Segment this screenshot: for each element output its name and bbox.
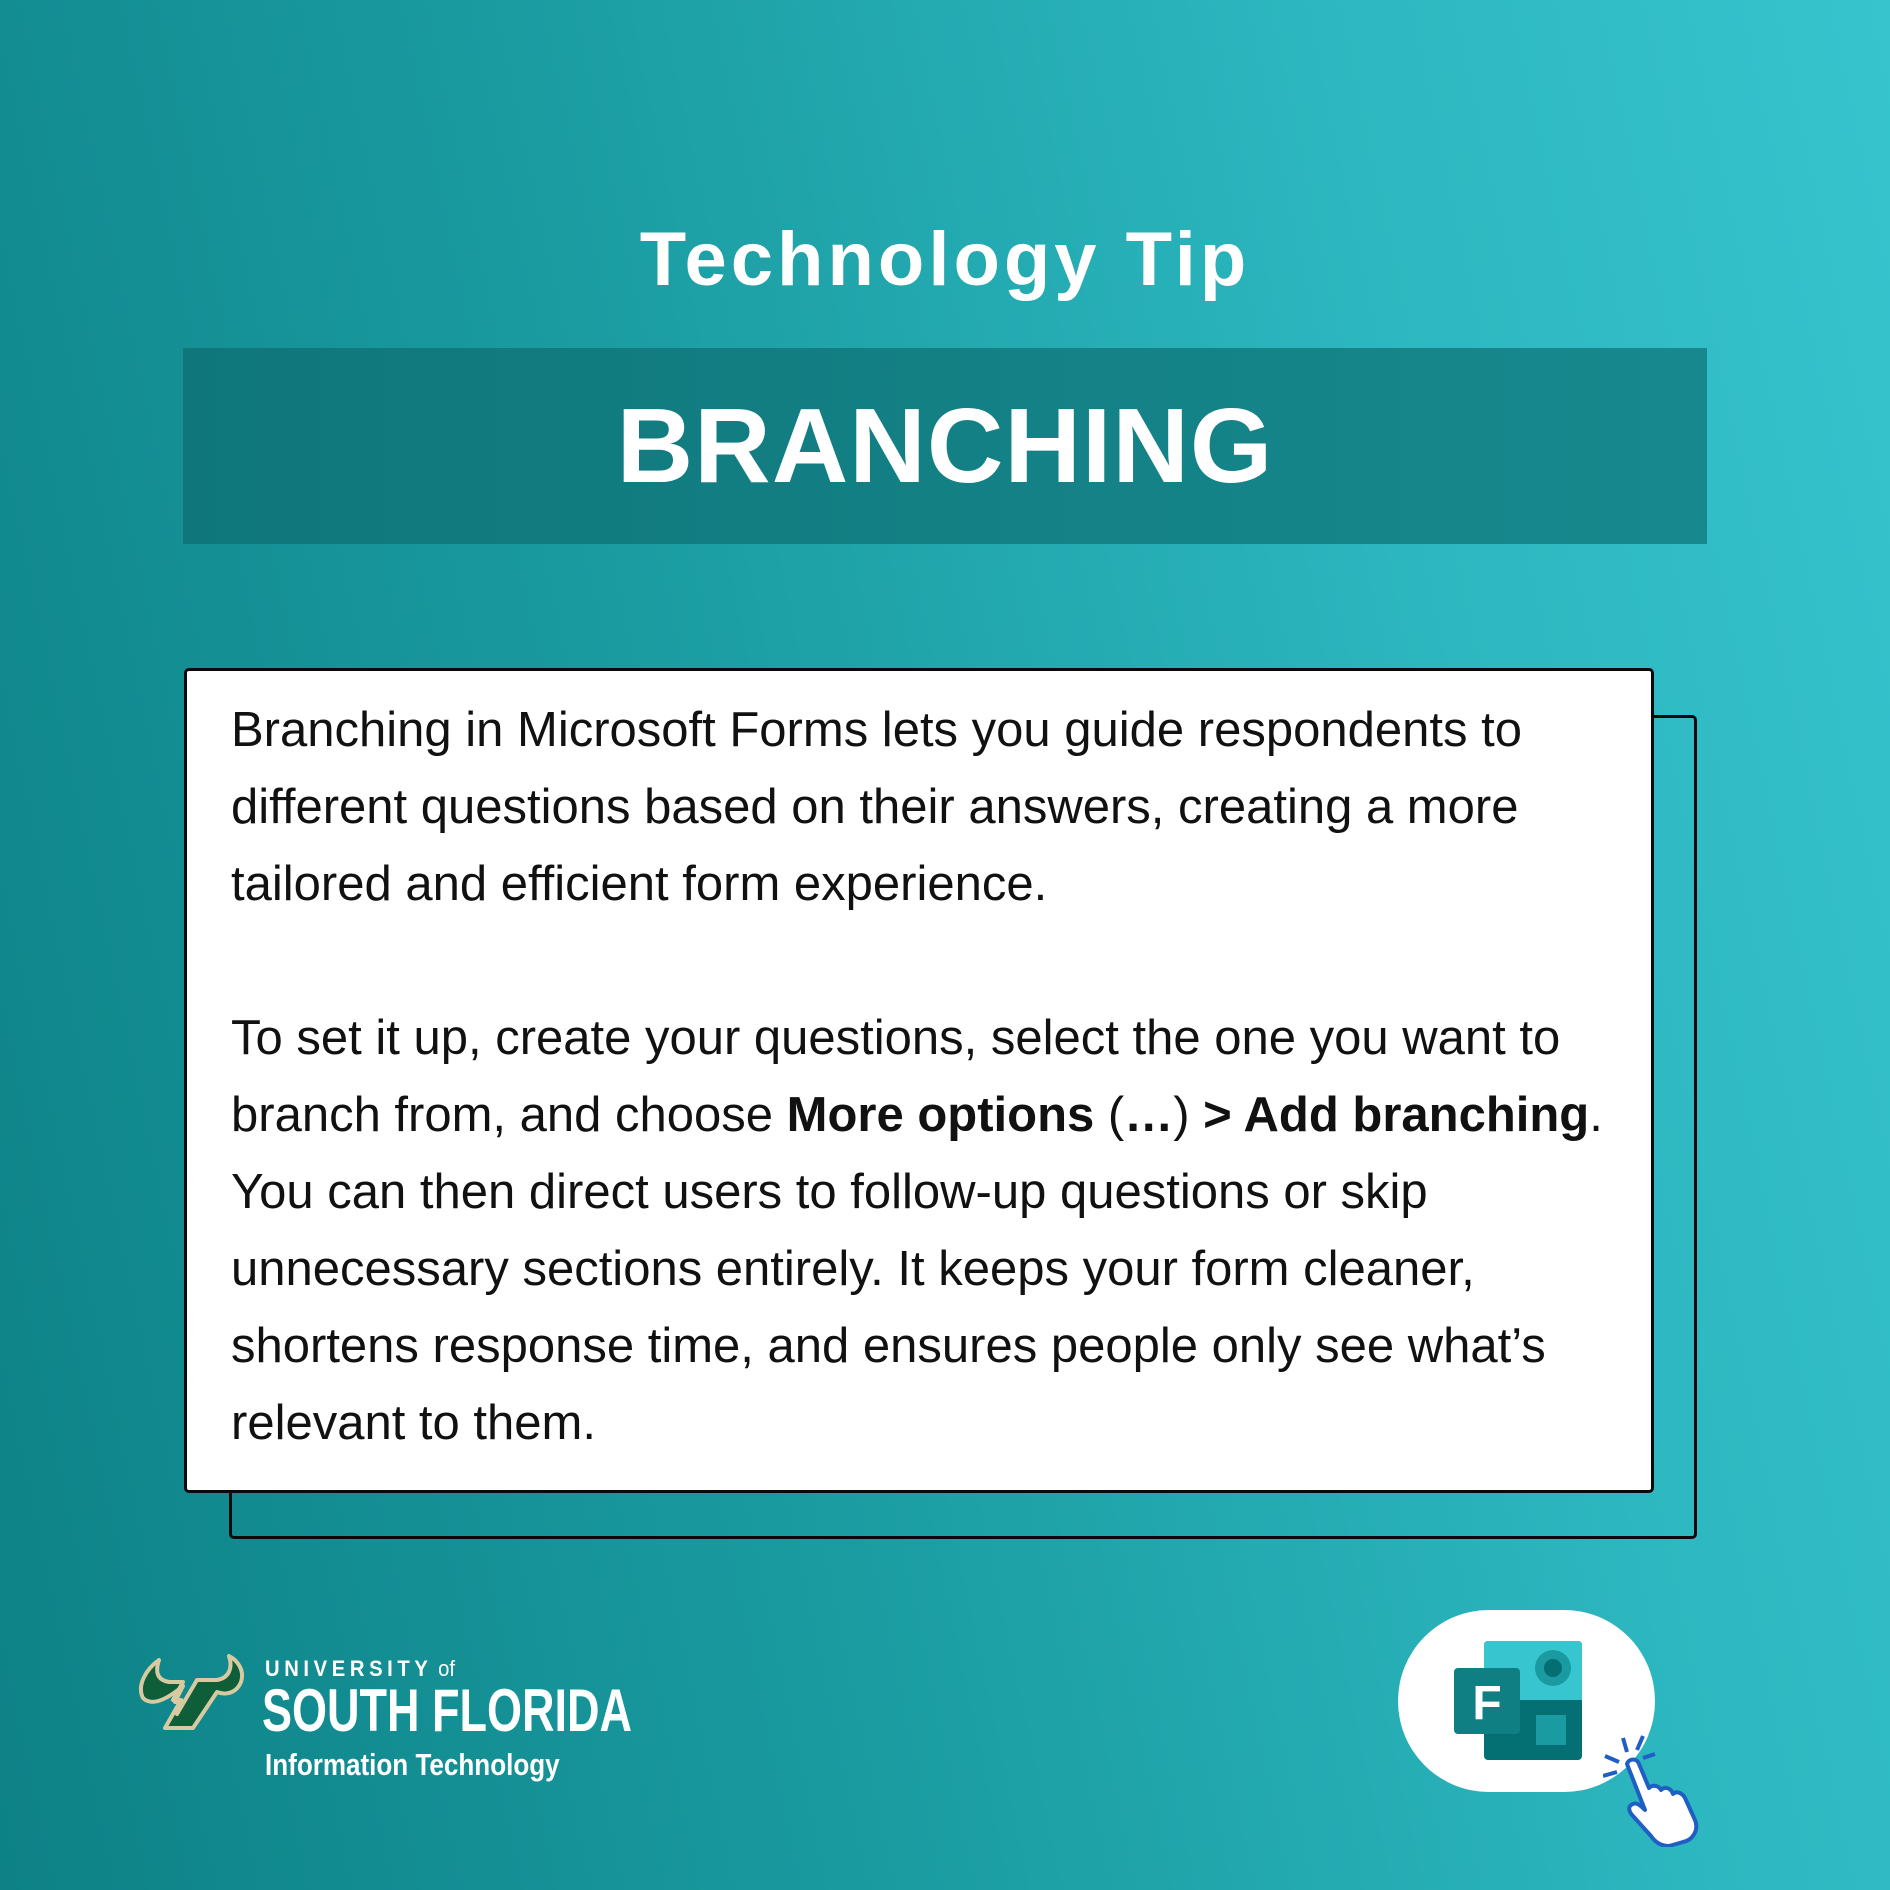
text block: To set it up, create your questions, select the one you want to: [231, 1011, 1560, 1065]
text block: You can then direct users to follow-up questions or skip: [231, 1165, 1428, 1219]
icon: bull horns: [138, 1654, 244, 1730]
banner: heading: [183, 348, 1707, 544]
text block: branch from, and choose More options (…) > Add branching.: [231, 1088, 1603, 1142]
card shadow frame: [229, 715, 1697, 1539]
text block: unnecessary sections entirely. It keeps your form cleaner,: [231, 1242, 1475, 1296]
text block: tailored and efficient form experience.: [231, 857, 1047, 911]
bubble: [1398, 1610, 1655, 1792]
heading text: BRANCHING: [617, 387, 1273, 505]
title: Technology Tip: [640, 217, 1250, 302]
icon: microsoft forms bubble: [1398, 1610, 1698, 1847]
text block: different questions based on their answers, creating a more: [231, 780, 1518, 834]
text block: [231, 703, 1603, 1450]
panel: text card: [184, 668, 1654, 1493]
text block: Branching in Microsoft Forms lets you guide respondents to: [231, 703, 1522, 757]
icon: pointer hand: [1603, 1735, 1698, 1847]
text block: relevant to them.: [231, 1396, 596, 1450]
icon: forms logo: [1454, 1641, 1582, 1760]
logo: USF IT: [138, 1654, 632, 1782]
logo text: information technology: Information Technology: [265, 1747, 560, 1782]
logo text: south florida: SOUTH FLORIDA: [262, 1677, 632, 1744]
icon: forms logo: F: [1472, 1677, 1502, 1730]
logo text: university of: UNIVERSITY of: [265, 1656, 455, 1681]
text block: shortens response time, and ensures people only see what’s: [231, 1319, 1546, 1373]
